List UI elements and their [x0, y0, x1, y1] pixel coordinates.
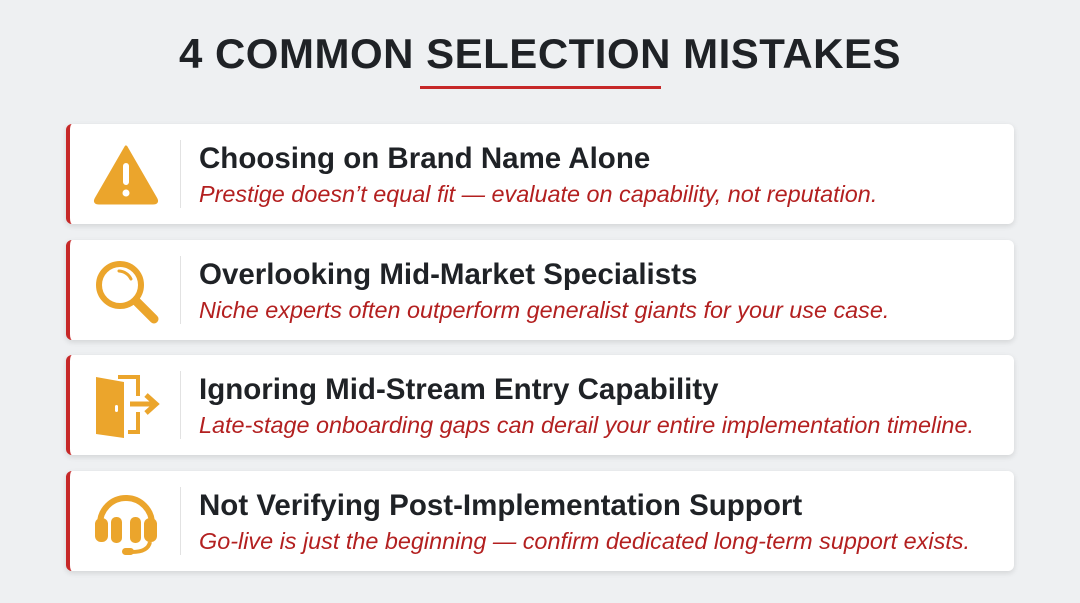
card: mid-stream: [66, 355, 1014, 455]
icon: door exit: [96, 375, 160, 438]
heading: Choosing on Brand Name Alone: [199, 142, 650, 175]
title underline: [420, 86, 661, 89]
card: support: [66, 471, 1014, 571]
icon: magnifier: [96, 261, 158, 324]
heading: Not Verifying Post-Implementation Support: [199, 489, 802, 522]
card: mid-market: [66, 240, 1014, 340]
icon: warning: [94, 145, 158, 204]
card: brand name: [66, 124, 1014, 224]
description: Go-live is just the beginning — confirm dedicated long-term support exists.: [199, 528, 970, 554]
description: Prestige doesn’t equal fit — evaluate on capability, not reputation.: [199, 181, 877, 207]
description: Niche experts often outperform generalist giants for your use case.: [199, 297, 889, 323]
heading: Ignoring Mid-Stream Entry Capability: [199, 373, 719, 406]
title: 4 COMMON SELECTION MISTAKES: [179, 30, 901, 77]
icon: headset: [95, 495, 157, 555]
description: Late-stage onboarding gaps can derail your entire implementation timeline.: [199, 412, 974, 438]
heading: Overlooking Mid-Market Specialists: [199, 258, 697, 291]
